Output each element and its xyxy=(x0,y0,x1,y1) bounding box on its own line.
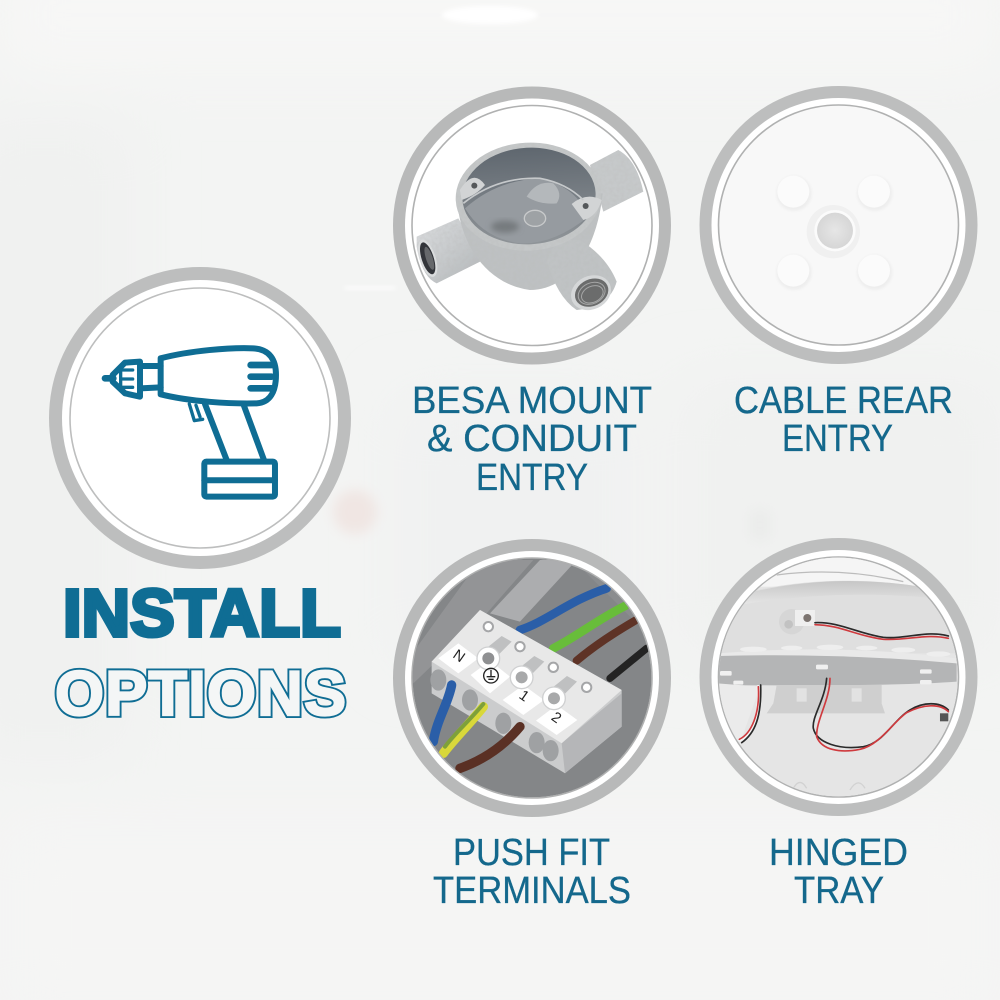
image: rear entry knockout xyxy=(776,176,892,290)
panel: push fit terminals xyxy=(393,539,671,817)
label: BESA mount and conduit entry: BESA MOUNT xyxy=(412,380,652,422)
panel: BESA mount and conduit entry xyxy=(393,86,671,364)
heading: OPTIONS: OPTIONS xyxy=(55,659,346,729)
label: cable rear entry: ENTRY xyxy=(782,418,893,460)
image: terminal block with wires: 1 xyxy=(516,688,532,705)
heading: INSTALL: INSTALL xyxy=(63,576,341,651)
panel: drill icon badge xyxy=(49,267,351,569)
image: hinged gear tray with wires xyxy=(717,557,960,800)
image: conduit box xyxy=(414,139,643,316)
label: cable rear entry: CABLE REAR xyxy=(734,380,953,422)
label: hinged tray xyxy=(769,832,908,912)
heading: OPTIONS: OPTIONS xyxy=(55,659,346,729)
label: BESA mount and conduit entry: & CONDUIT xyxy=(427,418,637,460)
label: hinged tray: TRAY xyxy=(794,870,884,912)
label: push fit terminals: PUSH FIT xyxy=(453,832,610,874)
icon: cordless drill xyxy=(105,348,276,497)
label: BESA mount and conduit entry: ENTRY xyxy=(476,457,588,499)
image: terminal block with wires: 2 xyxy=(548,709,564,727)
panel: hinged tray xyxy=(700,538,978,816)
image: terminal block with wires: N xyxy=(450,647,468,666)
label: hinged tray: HINGED xyxy=(769,832,908,874)
image: terminal block with wires xyxy=(410,557,653,800)
panel: cable rear entry xyxy=(700,86,978,364)
label: cable rear entry xyxy=(734,380,953,460)
label: push fit terminals xyxy=(433,832,631,912)
label: push fit terminals: TERMINALS xyxy=(433,870,631,912)
label: BESA mount and conduit entry xyxy=(412,380,652,499)
